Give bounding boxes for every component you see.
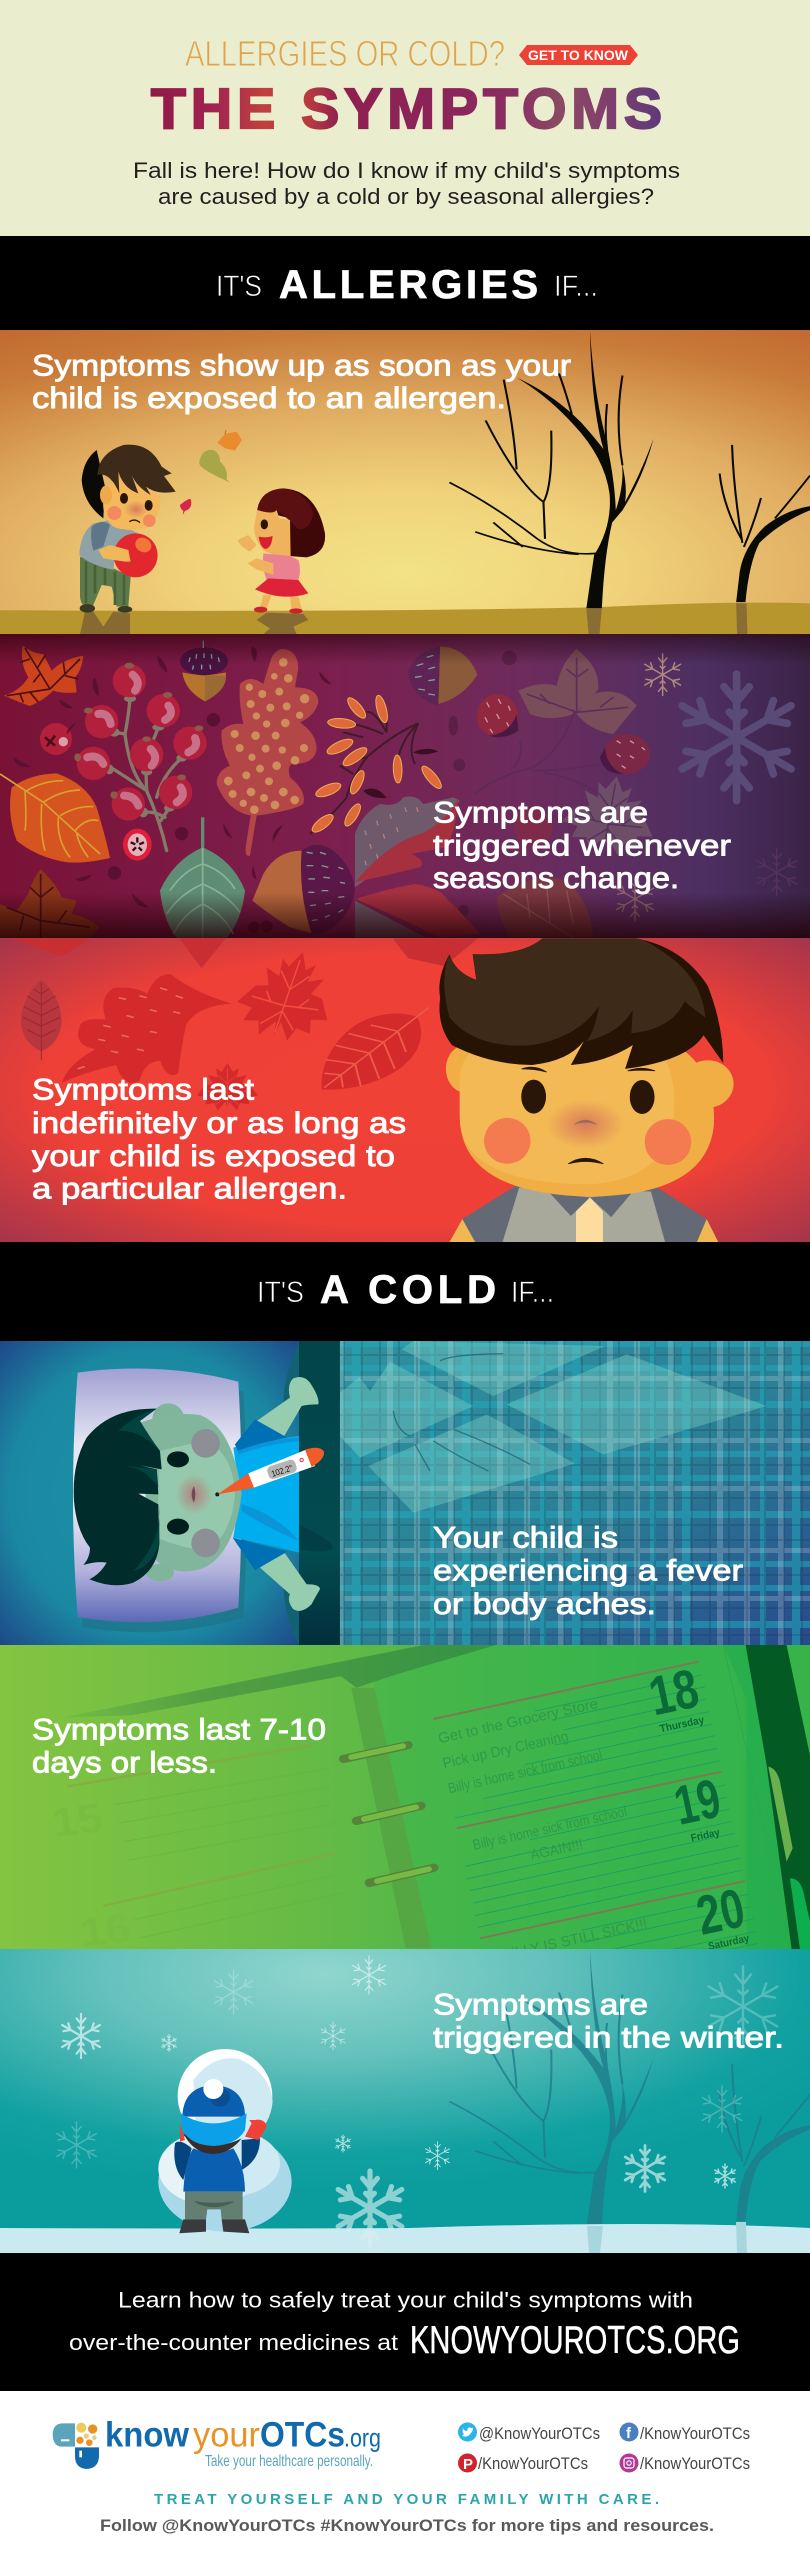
date 20: Saturday [707,1932,750,1953]
rose hip twig [310,694,444,835]
faded ovate leaf [497,878,593,938]
caption: indefinitely or as long as [32,1107,406,1140]
social: facebook: /KnowYourOTCs [640,2424,750,2443]
logo [53,2416,381,2470]
date 19: 19 [669,1767,726,1837]
logo wordmark [105,2416,381,2455]
boy with ball [79,445,176,613]
shirt [233,1419,333,1570]
girl [238,488,325,614]
lower oak and red leaves [355,796,480,938]
snowman [158,2049,292,2232]
illustration: leaves and sick boy [10,936,734,1247]
main title: the symptoms: THE SYMPTOMS [151,77,662,141]
oak leaf with dots [217,649,318,856]
caption: a particular allergen. [32,1173,347,1206]
children and leaves [79,430,325,634]
bare trees [449,331,810,608]
vignette [0,634,810,938]
date 19: Friday [690,1827,721,1845]
tree reflections [586,603,748,637]
date 19 [669,1767,726,1845]
hair [74,1409,162,1585]
strawberries [477,694,650,846]
section band: it's allergies if [0,236,810,330]
handwritten notes: Billy is home sick from school [471,1804,628,1854]
caption: Symptoms are [433,1989,648,2022]
bottom acorn [252,845,355,934]
snowflakes [57,1956,777,2245]
social: facebook: f [626,2425,632,2442]
orange veined leaf [0,773,110,863]
section band: it's a cold if [0,1242,810,1341]
handwritten notes: BILLY IS STILL SICK!!! [501,1916,649,1964]
ground and bare trees [0,331,810,637]
intro text: are caused by a cold or by seasonal allergies? [158,184,654,209]
social: pinterest: P [463,2456,473,2473]
badge: get to know [519,45,638,65]
intro text [133,158,680,209]
planner right page [433,1645,810,1979]
caption [433,1522,743,1621]
logo capsule icon [53,2423,99,2469]
caption [433,1989,784,2055]
snow ground [0,2224,810,2253]
social: pinterest: /KnowYourOTCs [478,2454,588,2473]
section band: it's a cold if: IF... [511,1276,554,1309]
social: instagram: /KnowYourOTCs [640,2454,750,2473]
section band: it's a cold if: IT'S [257,1276,304,1309]
caption [32,1074,406,1206]
panel: triggered when seasons change [0,634,810,938]
call to action band [0,2253,810,2391]
gray maple [518,649,637,734]
binder rings [344,1745,434,1883]
caption: or body aches. [433,1588,656,1621]
tree reflections [587,2222,747,2253]
intro text: Fall is here! How do I know if my child's symptoms [133,158,680,183]
handwritten notes [437,1696,649,1964]
logo wordmark: .org [344,2423,381,2453]
date 18: 18 [644,1657,704,1727]
caption: Symptoms last 7-10 [32,1714,326,1747]
green leaf [160,817,245,938]
follow line: Follow @KnowYourOTCs #KnowYourOTCs for more tips and resources. [100,2516,714,2535]
caption: child is exposed to an allergen. [32,382,506,415]
shoulders and shirt [450,1186,718,1242]
caption: experiencing a fever [433,1555,743,1588]
panel: fever or body aches [0,1341,810,1645]
snowflakes [616,654,797,921]
caption: Your child is [433,1522,618,1555]
caption: Symptoms are [433,797,648,830]
badge: get to know: GET TO KNOW [528,47,629,63]
handwritten notes: Billy is home sick from school [447,1748,604,1797]
caption: days or less. [32,1747,217,1780]
footer [0,2391,810,2572]
call to action band: over-the-counter medicines at [69,2330,398,2355]
date 20: 20 [691,1876,750,1947]
caption: seasons change. [433,862,679,895]
ground [0,603,810,637]
left page rules and dates [49,1745,346,1956]
tagline: Take your healthcare personally. [205,2453,373,2470]
faded dark seeds [449,651,517,917]
top acorn [180,641,228,701]
section band: it's allergies if: IF... [554,270,598,303]
caption: Symptoms last [32,1074,255,1107]
tagline: treat yourself: TREAT YOURSELF AND YOUR FAMILY WITH CARE. [154,2491,659,2508]
child reflections [80,612,308,634]
left page rules and dates: 15 [49,1795,106,1846]
top acorn half [408,646,477,706]
handwritten notes: Pick up Dry Cleaning [441,1729,570,1772]
handwritten notes: AGAIN!!! [529,1837,585,1864]
illustration: left side botanicals [0,641,480,938]
second gray maple [562,776,652,855]
section band: it's allergies if: ALLERGIES [279,263,538,307]
handwritten notes: Get to the Grocery Store [437,1696,600,1747]
bed edge [73,1341,340,1645]
call to action band: Learn how to safely treat your child's symptoms with [118,2288,693,2313]
bottom left maple [0,869,99,938]
head [140,1403,242,1581]
child from behind [174,2079,267,2233]
logo wordmark: know [105,2416,190,2455]
title line: allergies or cold: ALLERGIES OR COLD? [185,33,505,74]
maple top left [4,646,83,706]
panel: triggered in the winter [0,1949,810,2253]
scattered seeds [13,647,332,933]
head [446,1025,734,1197]
brown day rules [433,1662,745,1938]
caption: your child is exposed to [32,1140,395,1173]
caption: triggered whenever [433,829,731,862]
caption [433,797,731,895]
faded stems [474,714,578,794]
logo wordmark: OTCs [260,2416,345,2455]
red leaves [10,936,478,1110]
plaid blanket [317,1341,810,1645]
berry branch [40,663,207,861]
pillow [73,1368,247,1632]
section band: it's a cold if: A COLD [320,1268,496,1312]
header panel [0,0,810,236]
ruled lines [455,1675,758,1979]
arms [257,1377,320,1611]
logo wordmark: your [193,2416,260,2455]
social: twitter: @KnowYourOTCs [479,2424,600,2443]
section band: it's allergies if: IT'S [216,270,262,303]
falling leaves [180,430,242,515]
caption: Symptoms show up as soon as your [32,350,571,382]
panel: symptoms show up with exposure [0,330,810,637]
left page rules and dates: 16 [77,1906,134,1956]
snowman and child [158,2049,292,2233]
caption [32,1714,326,1780]
call to action band: KNOWYOUROTCS.ORG [410,2319,740,2362]
thermometer [217,1448,324,1494]
date 18: Thursday [659,1714,705,1735]
illustration: right side faded botanicals [408,646,797,938]
window light on blanket [317,1341,767,1513]
panel: lasts 7-10 days, planner [0,1645,810,1979]
caption: triggered in the winter. [433,2022,784,2055]
planner left page and spine [49,1645,746,1956]
hair [439,938,723,1069]
trees in teal [449,1950,810,2227]
panel: symptoms last indefinitely [0,936,810,1247]
thermometer: 102.2° [270,1463,294,1479]
caption [32,350,571,415]
